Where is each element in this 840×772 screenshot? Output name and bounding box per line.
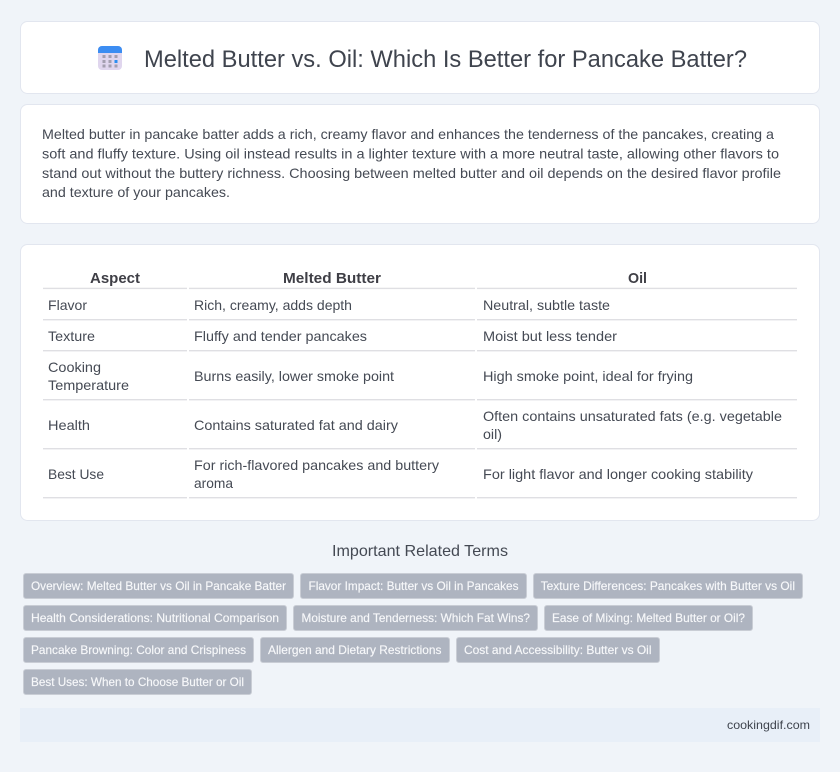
row: cooking temperature: Temperature: [48, 377, 129, 393]
table header: [90, 270, 647, 287]
chip: Texture Differences: Pancakes with Butter vs Oil: [541, 579, 795, 593]
row: best use: [48, 457, 753, 491]
intro text: and texture of your pancakes.: [42, 184, 230, 200]
heading: important related terms: Important Related Terms: [332, 543, 508, 560]
chip: Ease of Mixing: Melted Butter or Oil?: [552, 611, 745, 625]
row: flavor: Flavor: [48, 297, 87, 313]
intro text: stand out without the buttery richness. Choosing between melted butter and oil depends on the desired flavor profile: [42, 165, 781, 181]
row: texture: Fluffy and tender pancakes: [194, 328, 367, 344]
row: health: Often contains unsaturated fats (e.g. vegetable: [483, 408, 782, 424]
row: health: oil): [483, 426, 502, 442]
panel: comparison table: [20, 244, 820, 520]
intro text: soft and fluffy texture. Using oil instead results in a lighter texture with a more neutral taste, allowing other flavors to: [42, 146, 779, 162]
row: texture: Texture: [48, 328, 95, 344]
row: flavor: [48, 297, 610, 313]
row: cooking temperature: High smoke point, ideal for frying: [483, 368, 693, 384]
chip: Moisture and Tenderness: Which Fat Wins?: [302, 611, 530, 625]
row: cooking temperature: Cooking: [48, 359, 101, 375]
chip: [24, 574, 294, 598]
chip: Health Considerations: Nutritional Comparison: [31, 611, 279, 625]
intro text: Melted butter in pancake batter adds a rich, creamy flavor and enhances the tenderness of the pancakes, creating a: [42, 126, 774, 142]
row: best use: For rich-flavored pancakes and buttery: [194, 457, 439, 473]
panel: title header: [20, 22, 820, 94]
table header: Oil: [628, 270, 647, 287]
chip: [24, 670, 252, 694]
footer: cookingdif.com: [727, 718, 810, 732]
row: best use: aroma: [194, 475, 233, 491]
row: texture: [48, 328, 617, 344]
chip: Allergen and Dietary Restrictions: [268, 643, 442, 657]
chip: [294, 606, 538, 630]
panel: introduction: [20, 104, 820, 224]
table header: Melted Butter: [283, 270, 381, 287]
chip: Cost and Accessibility: Butter vs Oil: [464, 643, 652, 657]
chip: Flavor Impact: Butter vs Oil in Pancakes: [308, 579, 518, 593]
chip: [456, 638, 660, 662]
chip: [24, 638, 254, 662]
row: flavor: Neutral, subtle taste: [483, 297, 610, 313]
intro text: [42, 126, 781, 200]
related terms chips: [24, 574, 802, 694]
chip: Pancake Browning: Color and Crispiness: [31, 643, 246, 657]
chip: [534, 574, 802, 598]
title: Melted Butter vs. Oil: Which Is Better for Pancake Batter?: [144, 46, 747, 73]
footer: [20, 708, 820, 742]
row: texture: Moist but less tender: [483, 328, 617, 344]
row: cooking temperature: [48, 359, 693, 393]
row: cooking temperature: Burns easily, lower smoke point: [194, 368, 394, 384]
chip: Best Uses: When to Choose Butter or Oil: [31, 675, 244, 689]
chip: [260, 638, 450, 662]
row: best use: Best Use: [48, 466, 104, 482]
row: best use: For light flavor and longer cooking stability: [483, 466, 753, 482]
table header: Aspect: [90, 270, 140, 287]
chip: [24, 606, 286, 630]
row: health: Contains saturated fat and dairy: [194, 417, 398, 433]
chip: [544, 606, 752, 630]
row: flavor: Rich, creamy, adds depth: [194, 297, 352, 313]
row: health: Health: [48, 417, 90, 433]
row: health: [48, 408, 782, 442]
chip: Overview: Melted Butter vs Oil in Pancake Batter: [31, 579, 286, 593]
chip: [300, 574, 526, 598]
icon: calendar: [98, 46, 122, 70]
